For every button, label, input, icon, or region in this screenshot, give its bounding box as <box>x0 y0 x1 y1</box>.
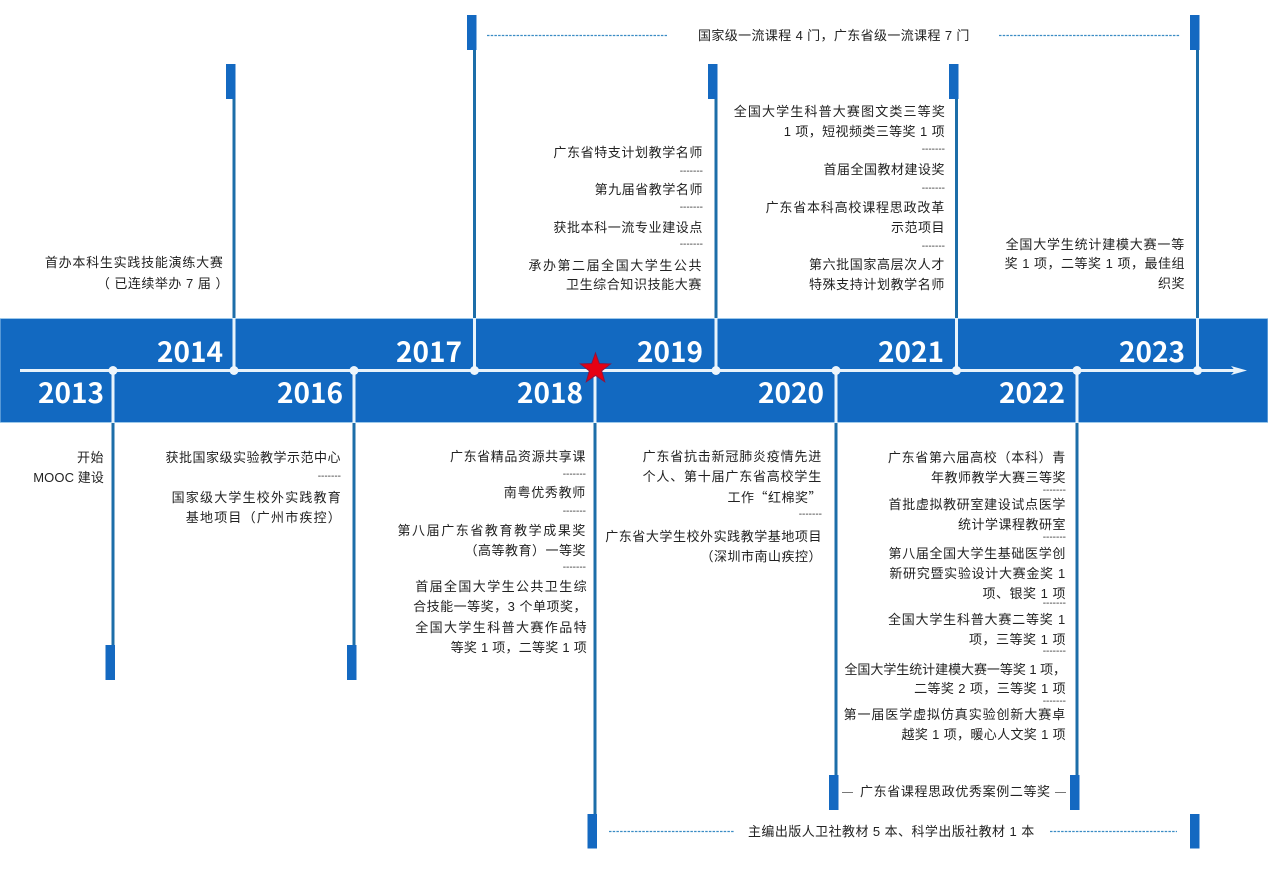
text: 2021: ------- <box>922 241 945 252</box>
stems inside band <box>113 318 1198 423</box>
text: 2022: 全国大学生科普大赛二等奖 1 <box>888 612 1066 627</box>
text: 2016: ------- <box>318 471 341 482</box>
text: 2018: 第八届广东省教育教学成果奖 <box>397 523 587 538</box>
text: 2020: 广东省抗击新冠肺炎疫情先进 <box>643 449 822 464</box>
text: 2018: 全国大学生科普大赛作品特 <box>415 620 588 635</box>
text: 2016: 获批国家级实验教学示范中心 <box>165 450 341 465</box>
text: 2018: （高等教育）一等奖 <box>464 543 586 558</box>
text: 2022: 首批虚拟教研室建设试点医学 <box>889 497 1066 512</box>
text: 2022: 年教师教学大赛三等奖 <box>931 470 1066 485</box>
text: 2016: 基地项目（广州市疾控） <box>186 510 342 525</box>
text: 2018: 南粤优秀教师 <box>504 485 586 500</box>
blue band <box>0 318 1268 422</box>
text: 2020: （深圳市南山疾控） <box>700 549 822 564</box>
text: 2018: ------- <box>563 562 586 573</box>
text: national course banner: 国家级一流课程 4 门，广东省级一流课程 7 门 <box>698 28 970 43</box>
text: 2018 <box>397 449 588 655</box>
text: 2020: 工作“红棉奖” <box>727 487 822 506</box>
text: 2019: 承办第二届全国大学生公共 <box>528 258 703 273</box>
text: 2014 <box>45 255 229 291</box>
text: 2022: 项，三等奖 1 项 <box>969 632 1066 647</box>
text: 2013: 开始 <box>77 450 104 465</box>
text: 2023 <box>1005 237 1185 291</box>
text: 2019: 广东省特支计划教学名师 <box>553 145 703 160</box>
text: 2014: （ 已连续举办 7 届 ） <box>97 276 229 291</box>
year 2023: 2023 <box>1119 331 1185 371</box>
text: 2020: 个人、第十届广东省高校学生 <box>643 469 822 484</box>
text: 2022: ------- <box>1043 532 1066 543</box>
text: 2020: 广东省大学生校外实践教学基地项目 <box>605 529 822 544</box>
text: 2022: 项、银奖 1 项 <box>983 586 1066 601</box>
text: 2021: ------- <box>922 183 945 194</box>
text: 2014: 首办本科生实践技能演练大赛 <box>45 255 224 270</box>
year 2022: 2022 <box>999 372 1065 412</box>
year 2014: 2014 <box>157 331 223 371</box>
text: 2018: 等奖 1 项，二等奖 1 项 <box>451 640 587 655</box>
text: 2022: 越奖 1 项，暖心人文奖 1 项 <box>901 727 1066 742</box>
text: 2022: 二等奖 2 项，三等奖 1 项 <box>914 681 1066 696</box>
text: 2023: 全国大学生统计建模大赛一等 <box>1006 237 1185 252</box>
year 2019: 2019 <box>637 331 703 371</box>
text: 2020: ------- <box>799 509 822 520</box>
text: 2021: 全国大学生科普大赛图文类三等奖 <box>734 104 946 119</box>
text: 2022: 新研究暨实验设计大赛金奖 1 <box>889 566 1066 581</box>
text: 2019: 第九届省教学名师 <box>595 182 703 197</box>
text: 2019 <box>528 145 703 292</box>
text: 2019: 卫生综合知识技能大赛 <box>566 277 702 292</box>
text: 2018: 合技能一等奖，3 个单项奖， <box>413 599 587 614</box>
text: 2021: 第六批国家高层次人才 <box>809 257 945 272</box>
text: 2022: 全国大学生统计建模大赛一等奖 1 项， <box>844 662 1066 677</box>
text: 2022: 第一届医学虚拟仿真实验创新大赛卓 <box>844 707 1066 722</box>
text: 2018: 广东省精品资源共享课 <box>450 449 586 464</box>
text: 2019: ------- <box>680 202 703 213</box>
text: textbook banner: 主编出版人卫社教材 5 本、科学出版社教材 1 本 <box>748 824 1035 839</box>
year 2013: 2013 <box>38 372 104 412</box>
text: 2019: ------- <box>680 166 703 177</box>
text: 2021: 示范项目 <box>891 220 945 235</box>
year 2017: 2017 <box>396 331 462 371</box>
text: 2022: 统计学课程教研室 <box>958 517 1066 532</box>
text: 2021: 首届全国教材建设奖 <box>823 162 945 177</box>
text: 2016: 国家级大学生校外实践教育 <box>172 490 342 505</box>
text: 2021: ------- <box>922 144 945 155</box>
text: 2022: ------- <box>1043 598 1066 609</box>
text: 2021: 特殊支持计划教学名师 <box>809 277 945 292</box>
text: 2021 <box>734 104 946 292</box>
axis nodes <box>108 366 1202 375</box>
text: 2023: 织奖 <box>1158 276 1185 291</box>
text: 2021: 1 项，短视频类三等奖 1 项 <box>784 124 945 139</box>
dashed leaders <box>487 36 1180 832</box>
text: 2022: 广东省第六届高校（本科）青 <box>888 450 1066 465</box>
year 2020: 2020 <box>758 372 824 412</box>
text: 2020 <box>605 449 822 564</box>
text: 2023: 奖 1 项，二等奖 1 项，最佳组 <box>1005 256 1185 271</box>
axis arrow <box>20 366 1247 375</box>
text: 2018: ------- <box>563 506 586 517</box>
stems outside band <box>113 15 1198 848</box>
text: 2013 <box>33 450 104 485</box>
text: 2018: ------- <box>563 469 586 480</box>
text: 2019: 获批本科一流专业建设点 <box>553 220 703 235</box>
text: 2022: ------- <box>1043 646 1066 657</box>
year 2021: 2021 <box>878 331 944 371</box>
short grey leaders <box>842 792 1066 794</box>
text: course ideology award: 广东省课程思政优秀案例二等奖 <box>860 784 1051 799</box>
year 2016: 2016 <box>277 372 343 412</box>
text: 2018: 首届全国大学生公共卫生综 <box>415 579 588 594</box>
text: 2022: 第八届全国大学生基础医学创 <box>889 546 1066 561</box>
text: 2022: ------- <box>1043 696 1066 707</box>
text: 2022 <box>844 450 1066 742</box>
text: 2021: 广东省本科高校课程思政改革 <box>766 200 945 215</box>
icon: red star <box>580 353 610 382</box>
text: 2013: MOOC 建设 <box>33 470 104 485</box>
text: 2022: ------- <box>1043 485 1066 496</box>
year 2018: 2018 <box>517 372 583 412</box>
text: 2016 <box>165 450 342 525</box>
text: 2019: ------- <box>680 239 703 250</box>
